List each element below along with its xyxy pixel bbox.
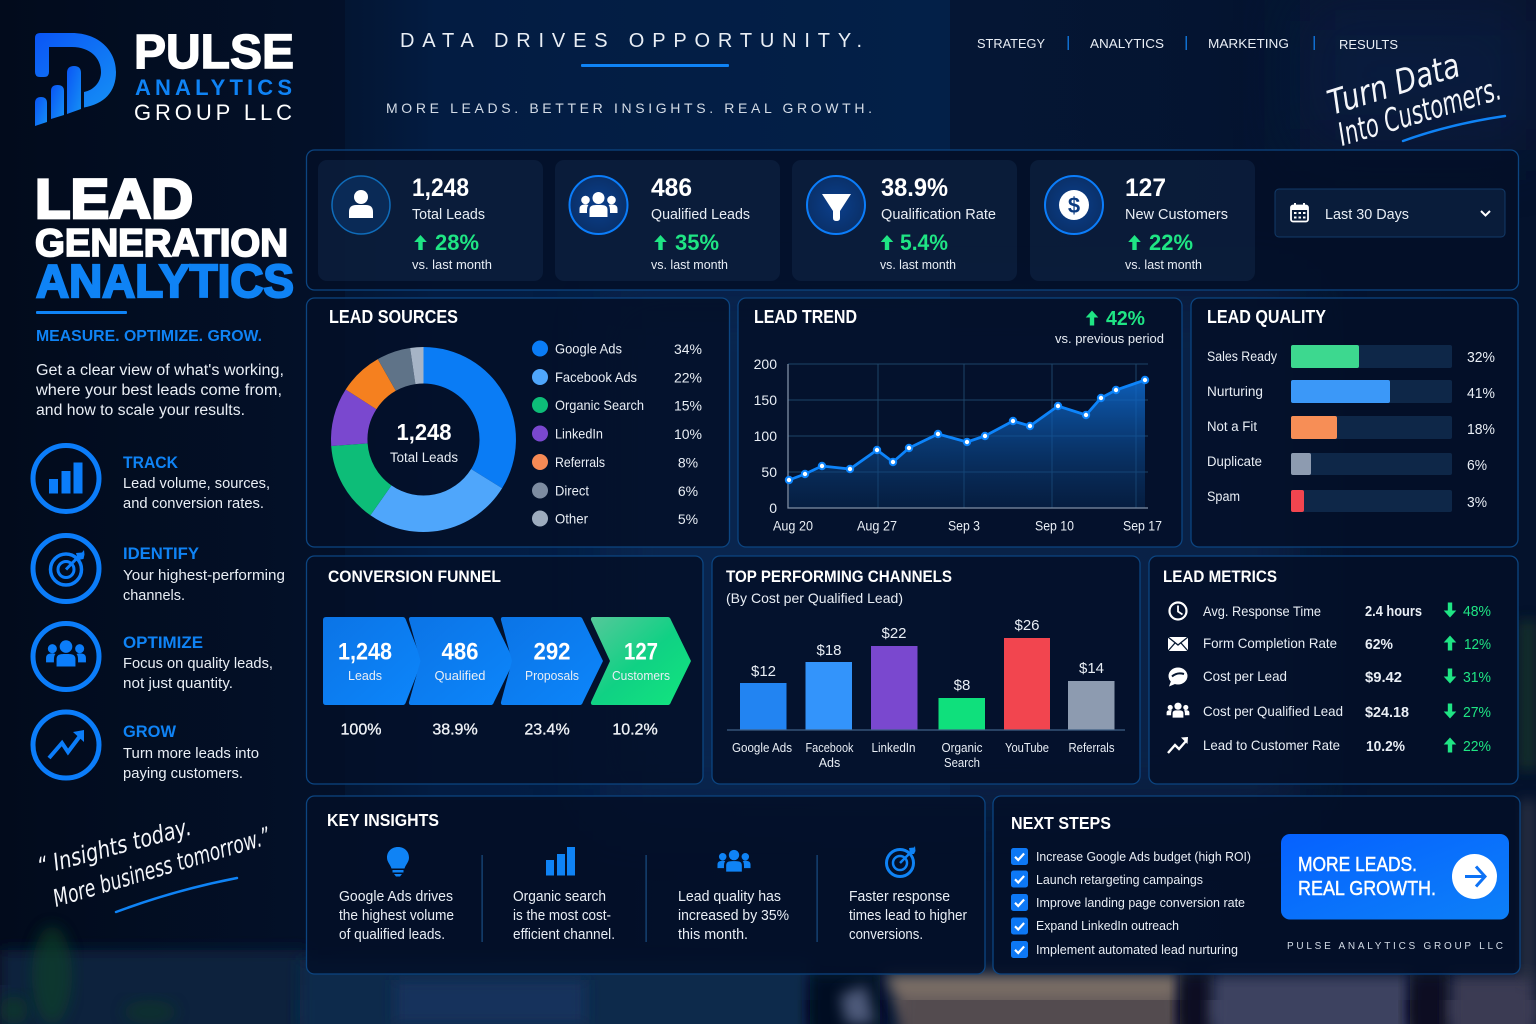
metric: cost per qualified lead bbox=[1167, 703, 1491, 721]
line chart: Aug 20 bbox=[773, 518, 813, 534]
panel: lead trend bbox=[738, 298, 1182, 547]
bar chart: Search bbox=[944, 756, 980, 770]
company footer: PULSE ANALYTICS GROUP LLC bbox=[1287, 941, 1503, 952]
main title bbox=[35, 167, 294, 307]
logo wordmark: PULSE bbox=[134, 26, 294, 79]
legend: Google Ads bbox=[555, 340, 622, 356]
metric: cost per lead bbox=[1168, 668, 1491, 686]
metric: response time: 48% bbox=[1463, 603, 1491, 620]
metric: cost per qualified lead: $24.18 bbox=[1365, 705, 1409, 721]
bar chart: Google Ads bbox=[732, 741, 792, 755]
quality bars: 6% bbox=[1467, 458, 1487, 474]
panel: next steps: NEXT STEPS bbox=[1011, 813, 1111, 833]
header slogan bbox=[386, 30, 872, 116]
insight: response time bbox=[849, 846, 967, 943]
checklist bbox=[1011, 848, 1251, 958]
tagline: MEASURE. OPTIMIZE. GROW. bbox=[36, 328, 262, 345]
line chart: 100 bbox=[754, 428, 777, 444]
metric: cost per lead: Cost per Lead bbox=[1203, 668, 1287, 684]
bar chart: $12 bbox=[751, 663, 776, 680]
panel: top performing channels: TOP PERFORMING CHANNELS bbox=[726, 567, 952, 586]
sidebar: grow: paying customers. bbox=[123, 766, 243, 782]
checklist: Increase Google Ads budget (high ROI) bbox=[1036, 849, 1251, 864]
panel: next steps bbox=[993, 796, 1520, 974]
KPI: qualified leads: 35% bbox=[675, 230, 719, 255]
intro paragraph bbox=[35, 362, 284, 419]
sidebar: grow: Turn more leads into bbox=[123, 746, 259, 762]
insight: response time: conversions. bbox=[849, 927, 923, 943]
funnel percentages: 10.2% bbox=[612, 722, 658, 738]
call to action button bbox=[1281, 834, 1509, 920]
donut chart bbox=[331, 347, 516, 532]
funnel chevrons bbox=[323, 617, 691, 705]
quality bars bbox=[1207, 345, 1495, 512]
bar chart: Referrals bbox=[1068, 741, 1114, 755]
metric: response time: 2.4 hours bbox=[1365, 604, 1422, 620]
panel: lead metrics: LEAD METRICS bbox=[1163, 567, 1277, 586]
navigation: MARKETING bbox=[1208, 36, 1289, 51]
handwritten quote: More business tomorrow.” bbox=[50, 822, 274, 913]
funnel chevrons: Customers bbox=[612, 668, 670, 683]
KPI: qualification rate: 38.9% bbox=[881, 174, 948, 202]
handwritten quote bbox=[34, 813, 274, 913]
icon: bar chart bbox=[33, 446, 99, 512]
KPI: total leads bbox=[318, 160, 543, 281]
sidebar: identify: Your highest-performing bbox=[123, 568, 285, 584]
panel: top performing channels: (By Cost per Qualified Lead) bbox=[726, 590, 903, 606]
metric: cost per lead: $9.42 bbox=[1365, 670, 1402, 686]
insight: lead quality: increased by 35% bbox=[678, 908, 789, 924]
line chart: Sep 10 bbox=[1035, 518, 1074, 534]
KPI: new customers: $ bbox=[1068, 193, 1080, 218]
legend: Other bbox=[555, 510, 588, 526]
line chart bbox=[754, 356, 1162, 534]
sidebar: track: TRACK bbox=[123, 454, 178, 472]
navigation: STRATEGY bbox=[977, 36, 1045, 51]
sidebar: grow bbox=[33, 712, 259, 782]
panel: lead metrics bbox=[1149, 556, 1518, 784]
KPI: new customers: New Customers bbox=[1125, 207, 1228, 223]
funnel percentages: 100% bbox=[341, 722, 381, 738]
legend: LinkedIn bbox=[555, 426, 603, 442]
slogan underline bbox=[1403, 116, 1505, 141]
KPI: new customers: 127 bbox=[1125, 174, 1166, 202]
sidebar: track bbox=[33, 446, 270, 512]
metric: response time bbox=[1170, 602, 1491, 620]
sidebar: optimize: OPTIMIZE bbox=[123, 634, 203, 652]
sidebar: identify: channels. bbox=[123, 588, 185, 604]
sidebar: track: and conversion rates. bbox=[123, 496, 264, 512]
panel: key insights bbox=[306, 796, 985, 974]
intro paragraph: Get a clear view of what's working, bbox=[36, 362, 284, 379]
bar chart: LinkedIn bbox=[872, 741, 916, 755]
bar chart: $22 bbox=[881, 625, 907, 642]
line chart: 200 bbox=[754, 356, 777, 372]
icon: calendar bbox=[1291, 203, 1308, 222]
bar chart: YouTube bbox=[1005, 741, 1049, 755]
sidebar: identify bbox=[33, 536, 285, 604]
metric: lead to customer: 22% bbox=[1463, 738, 1491, 755]
insight: lead quality: this month. bbox=[678, 927, 748, 943]
donut chart: 1,248 bbox=[396, 419, 452, 445]
main title: LEAD bbox=[35, 167, 193, 230]
KPI: qualified leads: 486 bbox=[651, 174, 692, 202]
funnel chevrons: Qualified bbox=[434, 668, 486, 683]
metric: cost per qualified lead: Cost per Qualified Lead bbox=[1203, 703, 1343, 719]
line chart: Aug 27 bbox=[857, 518, 897, 534]
quality bars: Duplicate bbox=[1207, 454, 1262, 469]
bar chart bbox=[727, 617, 1125, 770]
panel: conversion funnel bbox=[306, 556, 703, 784]
metric: cost per qualified lead: 27% bbox=[1463, 704, 1491, 721]
panel: conversion funnel: CONVERSION FUNNEL bbox=[328, 567, 501, 586]
quality bars: 32% bbox=[1467, 350, 1495, 366]
KPI: new customers: 22% bbox=[1149, 230, 1193, 255]
quote underline bbox=[116, 878, 237, 912]
logo: ANALYTICS bbox=[135, 75, 292, 100]
panel: lead quality bbox=[1191, 298, 1518, 547]
sidebar: track: Lead volume, sources, bbox=[123, 476, 270, 492]
funnel chevrons: 292 bbox=[534, 638, 570, 666]
panel: top performing channels bbox=[712, 556, 1140, 784]
funnel percentages: 23.4% bbox=[524, 722, 570, 738]
call to action button: REAL GROWTH. bbox=[1298, 878, 1436, 900]
trend delta bbox=[1055, 307, 1164, 346]
line chart: 0 bbox=[769, 500, 777, 516]
insight: google ads: Google Ads drives bbox=[339, 889, 453, 905]
bar chart: Facebook bbox=[806, 741, 854, 755]
navigation: ANALYTICS bbox=[1090, 36, 1164, 51]
icon: team bbox=[33, 624, 99, 690]
metric: form completion: Form Completion Rate bbox=[1203, 635, 1337, 651]
quality bars: 41% bbox=[1467, 386, 1495, 402]
funnel chevrons: 1,248 bbox=[338, 638, 392, 666]
handwritten quote: “ Insights today. bbox=[34, 813, 194, 881]
metric: lead to customer: Lead to Customer Rate bbox=[1203, 737, 1340, 753]
navigation bbox=[977, 36, 1398, 52]
bar chart: Organic bbox=[942, 741, 982, 755]
call to action button: MORE LEADS. bbox=[1298, 854, 1417, 876]
legend: 8% bbox=[678, 454, 698, 470]
legend: Facebook Ads bbox=[555, 369, 637, 385]
navigation: RESULTS bbox=[1339, 37, 1398, 52]
date dropdown: Last 30 Days bbox=[1325, 207, 1409, 223]
quality bars: 18% bbox=[1467, 422, 1495, 438]
insight: organic search bbox=[513, 847, 615, 943]
KPI: qualification rate: vs. last month bbox=[880, 257, 956, 272]
metric: form completion: 12% bbox=[1464, 636, 1491, 653]
KPI: total leads: Total Leads bbox=[412, 207, 485, 223]
legend: 15% bbox=[674, 398, 702, 414]
bar chart: Ads bbox=[819, 756, 840, 770]
intro paragraph: where your best leads come from, bbox=[35, 382, 282, 399]
header slogan: DATA DRIVES OPPORTUNITY. bbox=[400, 30, 862, 52]
icon: target bbox=[33, 536, 99, 602]
sidebar: identify: IDENTIFY bbox=[123, 545, 199, 563]
bar chart: $14 bbox=[1079, 660, 1104, 677]
quality bars: Not a Fit bbox=[1207, 419, 1257, 434]
insight: organic search: is the most cost- bbox=[513, 908, 611, 924]
metric: form completion: 62% bbox=[1365, 637, 1393, 653]
insight: lead quality bbox=[678, 850, 789, 943]
KPI: new customers: vs. last month bbox=[1125, 257, 1202, 272]
legend: 10% bbox=[674, 426, 702, 442]
insight: organic search: efficient channel. bbox=[513, 927, 615, 943]
trend delta: 42% bbox=[1106, 307, 1145, 330]
funnel chevrons: Proposals bbox=[525, 668, 579, 683]
legend: 34% bbox=[674, 341, 702, 357]
panel: KPI row bbox=[306, 150, 1518, 290]
funnel chevrons: Leads bbox=[348, 668, 382, 683]
sidebar: optimize: not just quantity. bbox=[123, 676, 233, 692]
funnel chevrons: 486 bbox=[442, 638, 478, 666]
main title: GENERATION bbox=[35, 222, 288, 265]
line chart: 50 bbox=[761, 464, 777, 480]
handwritten slogan: Turn Data bbox=[1323, 46, 1465, 124]
line chart: Sep 3 bbox=[948, 518, 980, 534]
KPI: total leads: 1,248 bbox=[412, 174, 469, 202]
insight: google ads bbox=[339, 847, 454, 943]
title divider bbox=[36, 311, 127, 314]
KPI: new customers bbox=[1030, 160, 1255, 281]
icon: growth arrow bbox=[33, 712, 99, 778]
legend: 5% bbox=[678, 511, 698, 527]
checklist: Improve landing page conversion rate bbox=[1036, 895, 1245, 910]
quality bars: 3% bbox=[1467, 495, 1487, 511]
sidebar: grow: GROW bbox=[123, 723, 176, 741]
KPI: qualification rate: Qualification Rate bbox=[881, 207, 996, 223]
panel: key insights: KEY INSIGHTS bbox=[327, 810, 439, 830]
insight: google ads: the highest volume bbox=[339, 908, 454, 924]
legend bbox=[532, 340, 702, 527]
checklist: Implement automated lead nurturing bbox=[1036, 942, 1238, 957]
main title: ANALYTICS bbox=[36, 255, 294, 307]
intro paragraph: and how to scale your results. bbox=[36, 402, 245, 419]
metric: lead to customer: 10.2% bbox=[1366, 739, 1405, 755]
panel: lead sources bbox=[306, 298, 730, 547]
legend: Referrals bbox=[555, 454, 605, 470]
KPI: total leads: vs. last month bbox=[412, 257, 492, 272]
header slogan: MORE LEADS. BETTER INSIGHTS. REAL GROWTH. bbox=[386, 100, 872, 116]
panel: lead trend: LEAD TREND bbox=[754, 307, 857, 327]
KPI: qualified leads: vs. last month bbox=[651, 257, 728, 272]
legend: Direct bbox=[555, 482, 589, 498]
checklist: Launch retargeting campaings bbox=[1036, 872, 1203, 887]
sidebar: optimize: Focus on quality leads, bbox=[123, 656, 273, 672]
legend: Organic Search bbox=[555, 397, 644, 413]
quality bars: Sales Ready bbox=[1207, 349, 1277, 364]
insight: response time: times lead to higher bbox=[849, 908, 967, 924]
bar chart: $18 bbox=[816, 642, 842, 659]
KPI: qualified leads: Qualified Leads bbox=[651, 207, 750, 223]
line chart: Sep 17 bbox=[1123, 518, 1162, 534]
date dropdown bbox=[1275, 189, 1505, 237]
logo: GROUP LLC bbox=[134, 100, 292, 125]
KPI: qualified leads bbox=[555, 160, 780, 281]
checklist: Expand LinkedIn outreach bbox=[1036, 918, 1179, 933]
quality bars: Nurturing bbox=[1207, 384, 1263, 399]
metric: form completion bbox=[1168, 635, 1491, 653]
panel: lead sources: LEAD SOURCES bbox=[329, 307, 458, 327]
legend: 6% bbox=[678, 483, 698, 499]
bar chart: $26 bbox=[1014, 617, 1040, 634]
insight: google ads: of qualified leads. bbox=[339, 927, 445, 943]
funnel percentages bbox=[341, 722, 658, 738]
legend: 22% bbox=[674, 370, 702, 386]
quality bars: Spam bbox=[1207, 489, 1240, 504]
KPI: qualification rate: 5.4% bbox=[900, 230, 948, 255]
bar chart: $8 bbox=[954, 677, 970, 694]
metric: cost per lead: 31% bbox=[1463, 669, 1491, 686]
trend delta: vs. previous period bbox=[1055, 331, 1164, 346]
insight: lead quality: Lead quality has bbox=[678, 889, 781, 905]
metric: lead to customer bbox=[1168, 737, 1491, 755]
funnel chevrons: 127 bbox=[624, 638, 658, 666]
logo bbox=[35, 26, 294, 126]
KPI: total leads: 28% bbox=[435, 230, 479, 255]
panel: lead quality: LEAD QUALITY bbox=[1207, 307, 1326, 327]
donut chart: Total Leads bbox=[390, 450, 458, 465]
insight: response time: Faster response bbox=[849, 889, 950, 905]
logo mark bbox=[35, 33, 116, 126]
funnel percentages: 38.9% bbox=[432, 722, 478, 738]
metric: response time: Avg. Response Time bbox=[1203, 603, 1321, 619]
sidebar: optimize bbox=[33, 624, 273, 692]
line chart: 150 bbox=[754, 392, 777, 408]
insight: organic search: Organic search bbox=[513, 889, 606, 905]
KPI: qualification rate bbox=[792, 160, 1017, 281]
